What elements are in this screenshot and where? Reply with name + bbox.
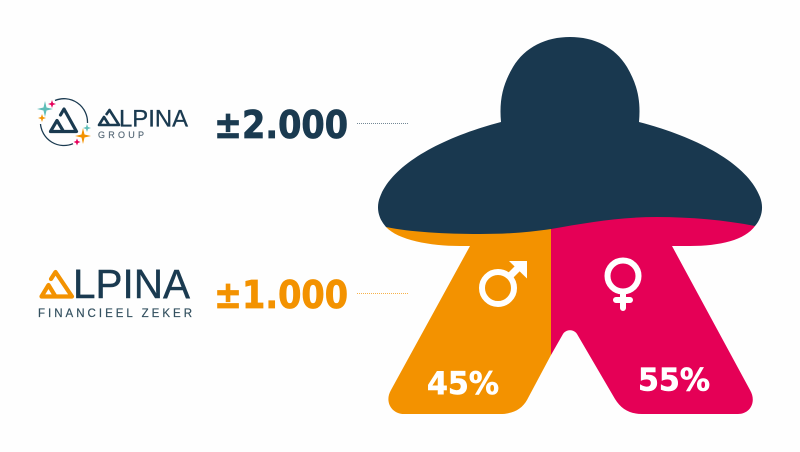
connector: group (357, 122, 408, 124)
leg: male orange (386, 205, 551, 414)
meeple figure (378, 37, 762, 414)
wordmark: GROUP: GROUP (98, 130, 144, 140)
wordmark: tagline: FINANCIEEL ZEKER (38, 308, 192, 320)
wordmark: LPINA: LPINA (73, 261, 191, 307)
icon: male symbol (482, 261, 527, 304)
icon: orange A mark (42, 272, 72, 296)
logo: Alpina Group (37, 99, 188, 146)
connector: financieel (357, 292, 408, 294)
leg: female pink (551, 205, 755, 414)
icon: ring with mountain and sparkles (37, 99, 91, 146)
logo: Alpina Financieel Zeker (38, 261, 192, 320)
icon: A mark (99, 110, 119, 125)
hat: navy (378, 37, 762, 234)
label: 55%: 55% (638, 362, 710, 398)
wordmark: LPINA: LPINA (119, 106, 188, 132)
value: group count: ±2.000 (214, 103, 348, 147)
label: 45%: 45% (427, 366, 499, 402)
icon: female symbol (608, 260, 638, 308)
value: financieel count: ±1.000 (214, 273, 348, 317)
